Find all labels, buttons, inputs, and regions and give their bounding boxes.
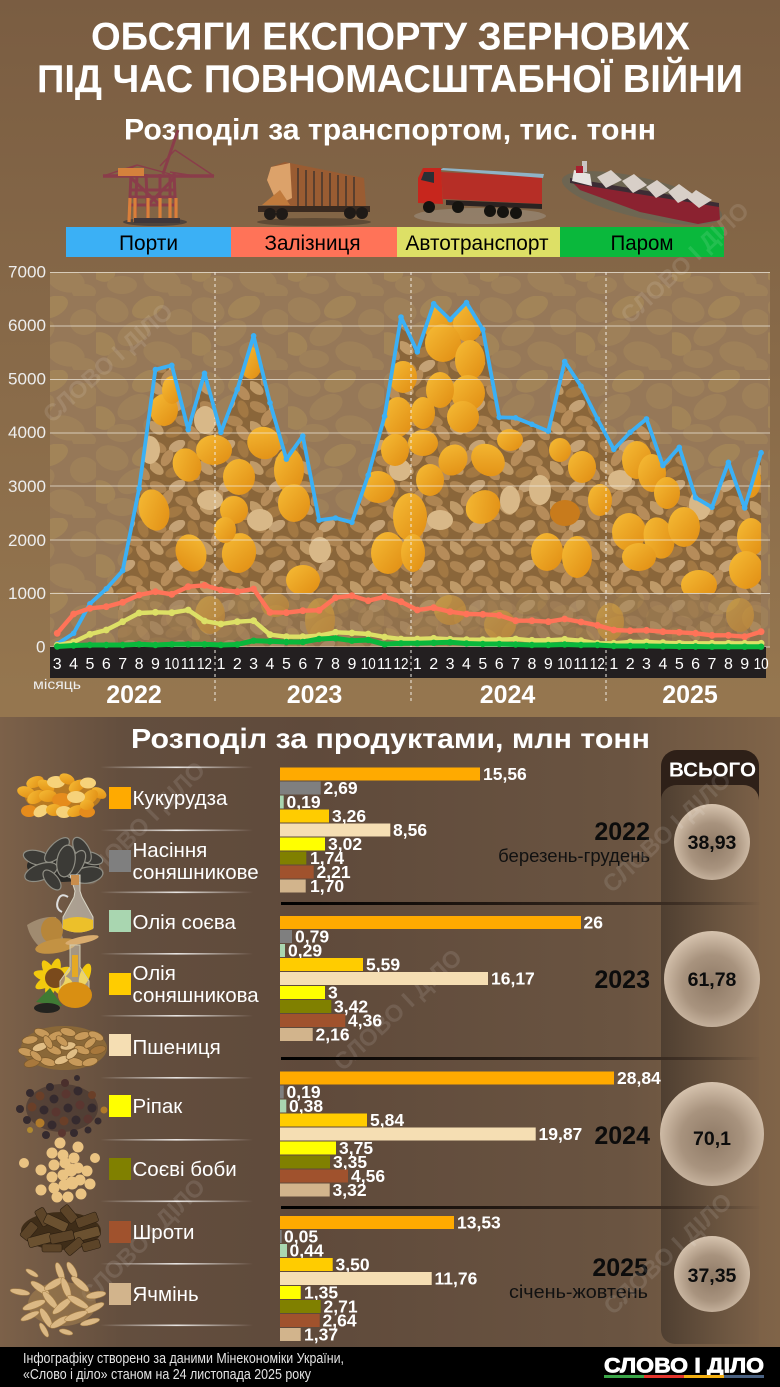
month strip: 6	[298, 656, 307, 673]
icon: soybeans	[19, 1138, 100, 1202]
y axis labels: 1000	[8, 584, 46, 603]
bar chart: 2024: 3,75	[339, 1138, 373, 1158]
year labels	[106, 681, 718, 709]
y axis labels: 6000	[8, 316, 46, 335]
total circles	[660, 804, 764, 1312]
bar chart: 2025: 0,44	[290, 1240, 324, 1260]
y axis labels	[8, 262, 46, 656]
legend: products: Шроти	[132, 1221, 194, 1244]
month strip: 9	[347, 656, 356, 673]
total circles: 70,1	[693, 1128, 731, 1150]
month strip: 1	[413, 656, 422, 673]
year captions: 2025	[592, 1254, 648, 1282]
bar chart: 2023: 4,36	[348, 1010, 382, 1030]
icon: soy oil bottle	[27, 875, 99, 957]
month strip	[50, 647, 769, 678]
legend: transport types: Паром	[610, 232, 674, 255]
bar chart: 2024: 28,84	[617, 1068, 661, 1088]
month strip: 9	[544, 656, 553, 673]
line: ferry	[57, 638, 761, 647]
bar chart: 2024: 0,38	[289, 1096, 323, 1116]
month strip: 4	[266, 656, 275, 673]
bar chart: 2022: 0,19	[286, 792, 321, 812]
month strip: 2	[233, 656, 242, 673]
legend: products: Кукурудза	[132, 787, 228, 810]
year captions: 2024	[594, 1122, 650, 1150]
line: rail	[57, 585, 761, 637]
legend: products: соняшникове	[132, 861, 259, 884]
bar chart: 2022	[280, 764, 527, 896]
legend: transport types: Автотранспорт	[406, 232, 549, 255]
panel: products	[0, 717, 780, 1347]
icon: wheat	[17, 1026, 107, 1070]
watermarks on chart	[38, 197, 755, 428]
year captions: березень-грудень	[498, 845, 650, 866]
month strip: 4	[69, 656, 78, 673]
bar chart: 2024: 0,19	[286, 1082, 321, 1102]
bar chart: 2023: 5,59	[366, 954, 400, 974]
footer: «Слово і діло» станом на 24 листопада 2025 року	[23, 1367, 312, 1383]
legend: products: Ріпак	[132, 1095, 183, 1118]
total column	[661, 750, 759, 1344]
month strip: 8	[331, 656, 340, 673]
line: ports	[57, 303, 761, 644]
watermarks on chart: СЛОВО І ДІЛО	[616, 197, 755, 329]
month strip: 5	[85, 656, 94, 673]
month strip: 1	[216, 656, 225, 673]
month strip: 9	[151, 656, 160, 673]
year labels: 2022	[106, 681, 162, 709]
y axis labels: 7000	[8, 262, 46, 282]
bar chart: 2025: 1,37	[304, 1324, 338, 1344]
watermarks on panel: СЛОВО І ДІЛО	[75, 756, 211, 892]
legend: products: соняшникова	[132, 984, 259, 1007]
icon: ferry ship	[558, 160, 726, 236]
bar chart: 2023: 16,17	[491, 968, 535, 988]
total column: ВСЬОГО	[669, 760, 756, 782]
legend: products: Пшениця	[132, 1036, 221, 1059]
month strip: 8	[527, 656, 536, 673]
month strip: 7	[511, 656, 520, 673]
title: ОБСЯГИ ЕКСПОРТУ ЗЕРНОВИХ	[91, 16, 690, 58]
bar chart: 2023: 0,29	[288, 940, 322, 960]
month strip: 10	[164, 656, 179, 673]
month strip: 7	[708, 656, 717, 673]
year separators	[281, 902, 761, 1209]
month strip: 3	[249, 656, 258, 673]
bar chart: 2022: 3,02	[328, 834, 362, 854]
month strip: 4	[462, 656, 471, 673]
bar chart: 2022: 15,56	[483, 764, 527, 784]
month strip: 3	[642, 656, 651, 673]
legend: products	[109, 787, 259, 1306]
bar chart: 2024: 19,87	[538, 1124, 582, 1144]
month strip: 5	[478, 656, 487, 673]
year captions: січень-жовтень	[509, 1281, 648, 1302]
bar chart: 2023: 2,16	[316, 1024, 350, 1044]
y axis labels: 0	[36, 638, 45, 656]
bar chart: 2022: 2,69	[324, 778, 358, 798]
faded photo band	[118, 593, 761, 647]
subtitle: transport: Розподіл за транспортом, тис. тонн	[124, 114, 656, 146]
logo: СЛОВО І ДІЛО	[604, 1354, 764, 1378]
grain photo under port line	[100, 290, 770, 600]
bar chart: 2024: 4,56	[351, 1166, 385, 1186]
chart: transport line chart	[8, 197, 770, 702]
icon: corn	[16, 771, 108, 820]
year labels: 2025	[662, 681, 718, 709]
icon: sunflower oil	[32, 945, 94, 1013]
month strip: 9	[740, 656, 749, 673]
bar chart: 2022: 3,26	[332, 806, 366, 826]
legend: products: Соєві боби	[132, 1158, 237, 1181]
bar chart: 2025: 3,50	[336, 1254, 370, 1274]
bar chart: 2023	[280, 912, 603, 1044]
icon: port crane	[103, 130, 214, 226]
bar chart: 2022: 1,70	[310, 876, 344, 896]
month strip: 7	[315, 656, 324, 673]
year labels: 2023	[287, 681, 342, 709]
watermarks on panel: СЛОВО І ДІЛО	[75, 1173, 211, 1309]
bar chart: 2024	[280, 1068, 661, 1200]
month strip: 2	[626, 656, 635, 673]
month strip: 4	[658, 656, 667, 673]
icon: hopper wagon	[257, 162, 371, 226]
y axis labels: 5000	[8, 370, 46, 388]
month strip: 3	[446, 656, 455, 673]
y axis labels: 3000	[8, 477, 46, 496]
legend: transport types: Порти	[119, 232, 178, 255]
bar chart: 2025: 2,71	[324, 1296, 358, 1316]
bar chart: 2024: 3,35	[333, 1152, 367, 1172]
month strip: 8	[135, 656, 144, 673]
legend: products: Олія соєва	[132, 911, 237, 934]
bar chart: 2023: 0,79	[295, 926, 329, 946]
bar chart: 2025: 11,76	[434, 1268, 478, 1288]
icon: meal pellets	[19, 1204, 101, 1256]
icon: barley	[10, 1261, 106, 1338]
month strip: 10	[361, 656, 376, 673]
total circles: 38,93	[688, 832, 737, 854]
total circles: 37,35	[688, 1265, 737, 1287]
watermarks on totals	[598, 766, 738, 1320]
year captions: 2022	[594, 818, 650, 846]
title: ПІД ЧАС ПОВНОМАСШТАБНОЇ ВІЙНИ	[37, 56, 743, 101]
bar chart: 2023: 3	[328, 982, 338, 1002]
legend dividers	[100, 766, 253, 1326]
month strip: 2	[429, 656, 438, 673]
year captions: 2023	[594, 966, 650, 994]
month strip: 12	[590, 656, 605, 673]
year captions	[498, 818, 650, 1302]
line: road	[57, 610, 761, 645]
month strip: 6	[495, 656, 504, 673]
month strip: 6	[691, 656, 700, 673]
month strip: 11	[181, 656, 196, 673]
watermarks on panel: СЛОВО І ДІЛО	[329, 944, 468, 1076]
watermarks on totals: СЛОВО І ДІЛО	[598, 766, 737, 898]
bar chart: 2025: 0,05	[284, 1226, 318, 1246]
month strip: 5	[282, 656, 291, 673]
month strip: 11	[377, 656, 392, 673]
bar chart: 2022: 1,74	[310, 848, 344, 868]
y axis labels: 4000	[8, 423, 46, 442]
month strip: 12	[197, 656, 212, 673]
bar chart: 2022: 2,21	[316, 862, 351, 882]
heading: products: Розподіл за продуктами, млн тонн	[131, 723, 650, 754]
icon: grain truck	[414, 168, 546, 224]
legend: transport types: Залізниця	[264, 232, 360, 255]
month strip: 12	[394, 656, 409, 673]
bar chart: 2023: 3,42	[334, 996, 368, 1016]
bar chart: 2025	[280, 1212, 501, 1344]
bar chart: 2025: 13,53	[457, 1212, 501, 1232]
watermarks on panel	[75, 756, 468, 1309]
total circles: 61,78	[688, 969, 737, 991]
icon: sunflower seeds	[22, 834, 104, 893]
month strip: 6	[102, 656, 111, 673]
month strip: 10	[557, 656, 572, 673]
month strip: 7	[118, 656, 127, 673]
year dividers	[215, 272, 606, 702]
month strip: 3	[53, 656, 62, 673]
bar chart: 2023: 26	[584, 912, 603, 932]
title	[37, 16, 743, 101]
icon: rapeseed	[16, 1075, 108, 1139]
footer	[0, 1347, 780, 1387]
watermarks on totals: СЛОВО І ДІЛО	[599, 1188, 738, 1320]
bar chart: 2022: 8,56	[393, 820, 427, 840]
bar chart: 2024: 5,84	[370, 1110, 404, 1130]
legend: products: Олія	[132, 962, 176, 985]
month strip: 5	[675, 656, 684, 673]
legend: products: Ячмінь	[132, 1283, 199, 1306]
grid lines	[50, 272, 770, 647]
year labels: 2024	[480, 681, 535, 709]
bar chart: 2024: 3,32	[332, 1180, 367, 1200]
bar chart: 2025: 2,64	[322, 1310, 357, 1330]
month strip: 10	[754, 656, 769, 673]
month strip: 11	[574, 656, 589, 673]
month strip: 8	[724, 656, 733, 673]
y axis labels: 2000	[8, 531, 46, 550]
legend: products: Насіння	[132, 839, 207, 862]
legend: transport types	[66, 227, 724, 257]
watermarks on chart: СЛОВО І ДІЛО	[38, 298, 179, 428]
footer: Інфографіку створено за даними Мінекономіки України,	[23, 1351, 344, 1367]
month strip: 1	[609, 656, 618, 673]
label: month: місяць	[33, 676, 81, 692]
bar chart: 2025: 1,35	[304, 1282, 338, 1302]
